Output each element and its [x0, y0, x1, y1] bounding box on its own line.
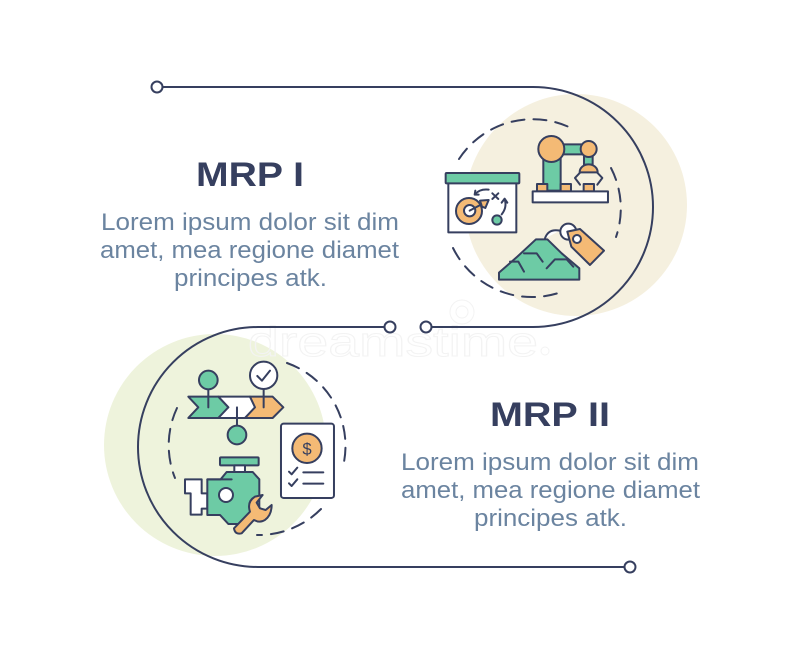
- text block: MRP I: principes atk.: [174, 265, 327, 292]
- text block: MRP II: amet, mea regione diamet: [401, 477, 700, 504]
- connector line: bottom: [138, 322, 636, 572]
- connector line: top: [152, 82, 653, 332]
- text block: MRP I: Lorem ipsum dolor sit dim: [101, 209, 399, 236]
- dashed ring: bottom: [169, 363, 345, 535]
- text block: MRP II: [401, 449, 700, 532]
- text block: MRP II: principes atk.: [474, 505, 627, 532]
- icon: robotic arm: [533, 136, 608, 202]
- text block: MRP I: amet, mea regione diamet: [100, 237, 399, 264]
- icon: process chevrons: [188, 362, 283, 444]
- heading: MRP II: MRP II: [490, 396, 610, 434]
- watermark: dreamstime: [248, 318, 538, 365]
- icon: resource pile with price tag: [499, 224, 604, 280]
- watermark: [248, 300, 549, 365]
- icon: engine with wrench: [185, 457, 272, 534]
- icon: invoice document: [281, 424, 334, 498]
- heading: MRP I: MRP I: [196, 156, 304, 194]
- text block: MRP II: Lorem ipsum dolor sit dim: [401, 449, 699, 476]
- dashed ring: top: [453, 119, 621, 297]
- icon: invoice document: $: [302, 439, 312, 458]
- icon: strategy board: [446, 173, 519, 232]
- beige circle backdrop: [465, 94, 687, 316]
- text block: MRP I: [100, 209, 399, 292]
- light green circle backdrop: [104, 334, 326, 556]
